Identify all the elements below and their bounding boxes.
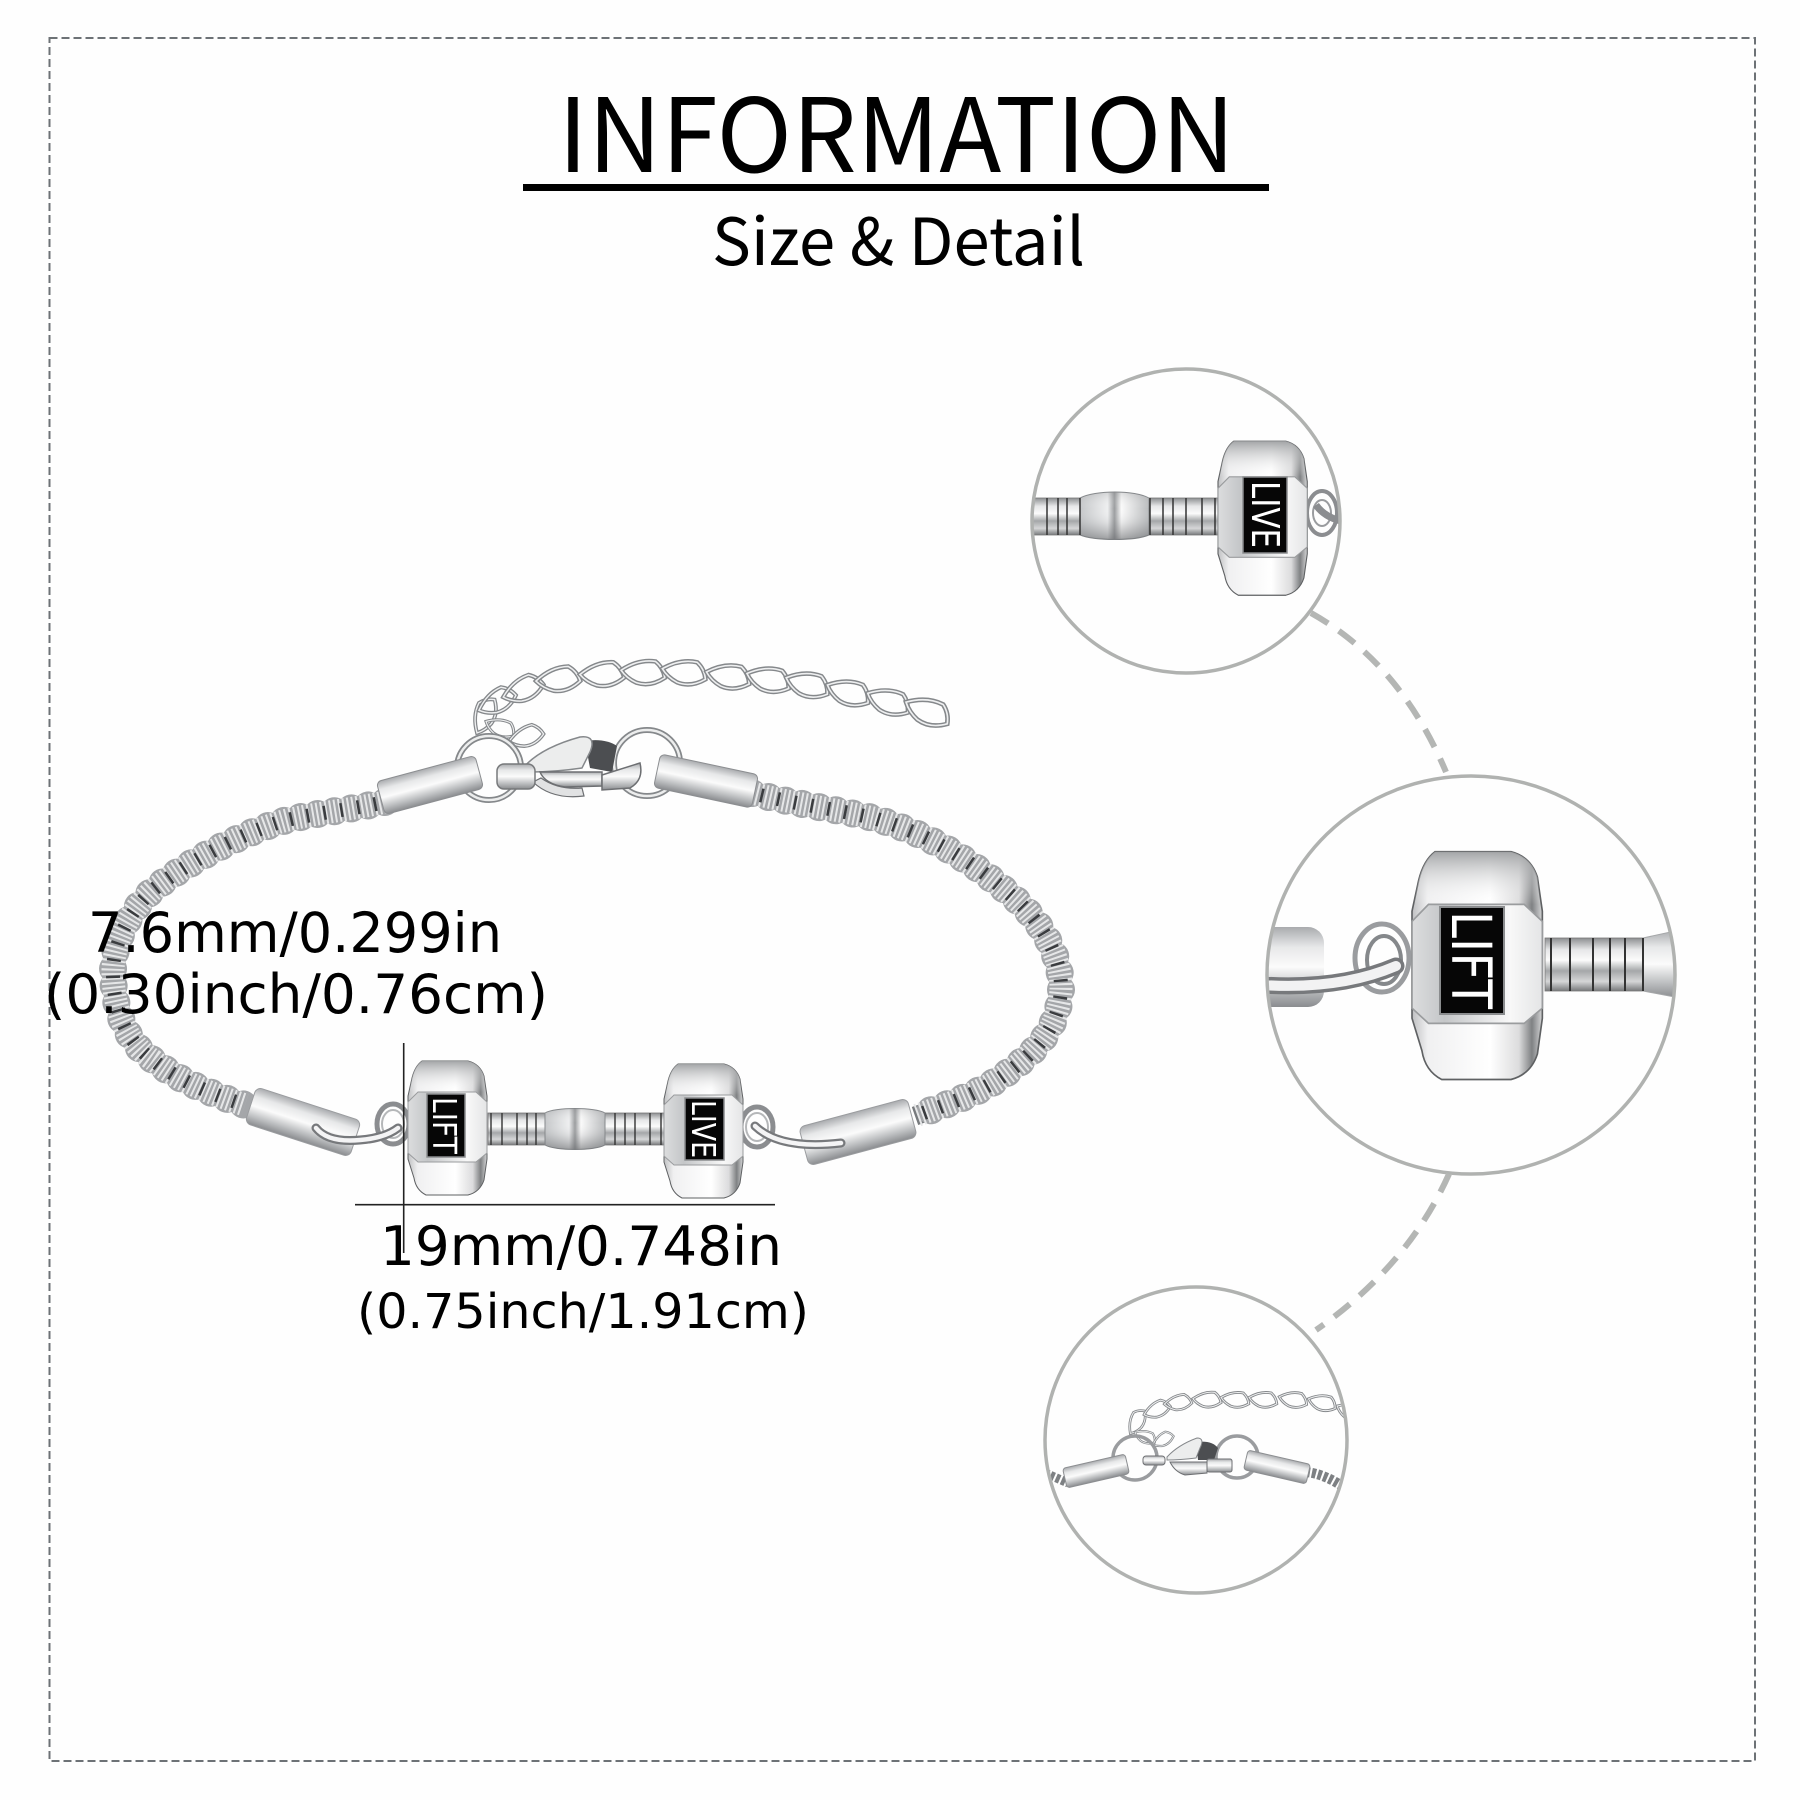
width dimension label: 19mm/0.748in: [380, 1215, 782, 1278]
LIFT dumbbell plate: [408, 1061, 487, 1195]
subtitle: Size & Detail: [712, 190, 1085, 284]
dashed connector: top to middle circle: [1311, 613, 1446, 772]
bottom left chain cap: [245, 1087, 361, 1157]
dumbbell bar: [488, 1108, 666, 1150]
title underline: [523, 184, 1269, 191]
rope chain: right side: [752, 793, 1061, 1116]
title: INFORMATION: [558, 55, 1235, 202]
bracelet illustration: [113, 658, 1061, 1198]
rope chain: left side: [113, 802, 385, 1105]
LIVE dumbbell plate: [664, 1064, 743, 1198]
detail circle: LIFT plate: LIFT: [1439, 911, 1503, 1009]
LIFT dumbbell plate: LIFT: [425, 1097, 464, 1155]
top right chain cap: [654, 754, 758, 808]
detail circle: LIVE plate: LIVE: [1243, 481, 1287, 548]
dimension lines: [355, 1043, 775, 1253]
detail circle: clasp and extension chain: [1045, 1287, 1366, 1593]
detail circle: LIVE plate: [1030, 369, 1345, 673]
height dimension label: 7.6mm/0.299in: [88, 901, 502, 965]
extension chain: [469, 658, 953, 751]
width dimension label: (0.75inch/1.91cm): [357, 1284, 809, 1340]
bottom right chain cap: [799, 1098, 917, 1166]
lobster clasp: [497, 737, 641, 797]
top left chain cap: [376, 755, 484, 815]
height dimension label: (0.30inch/0.76cm): [44, 963, 548, 1026]
height dimension label: [44, 901, 548, 1026]
connector rings: [316, 1104, 841, 1147]
width dimension label: [357, 1215, 809, 1340]
jump rings at clasp: [457, 730, 680, 800]
dashed connector: middle to bottom circle: [1316, 1174, 1449, 1330]
detail circle: LIFT plate: [1255, 776, 1680, 1174]
LIVE dumbbell plate: LIVE: [684, 1100, 723, 1158]
